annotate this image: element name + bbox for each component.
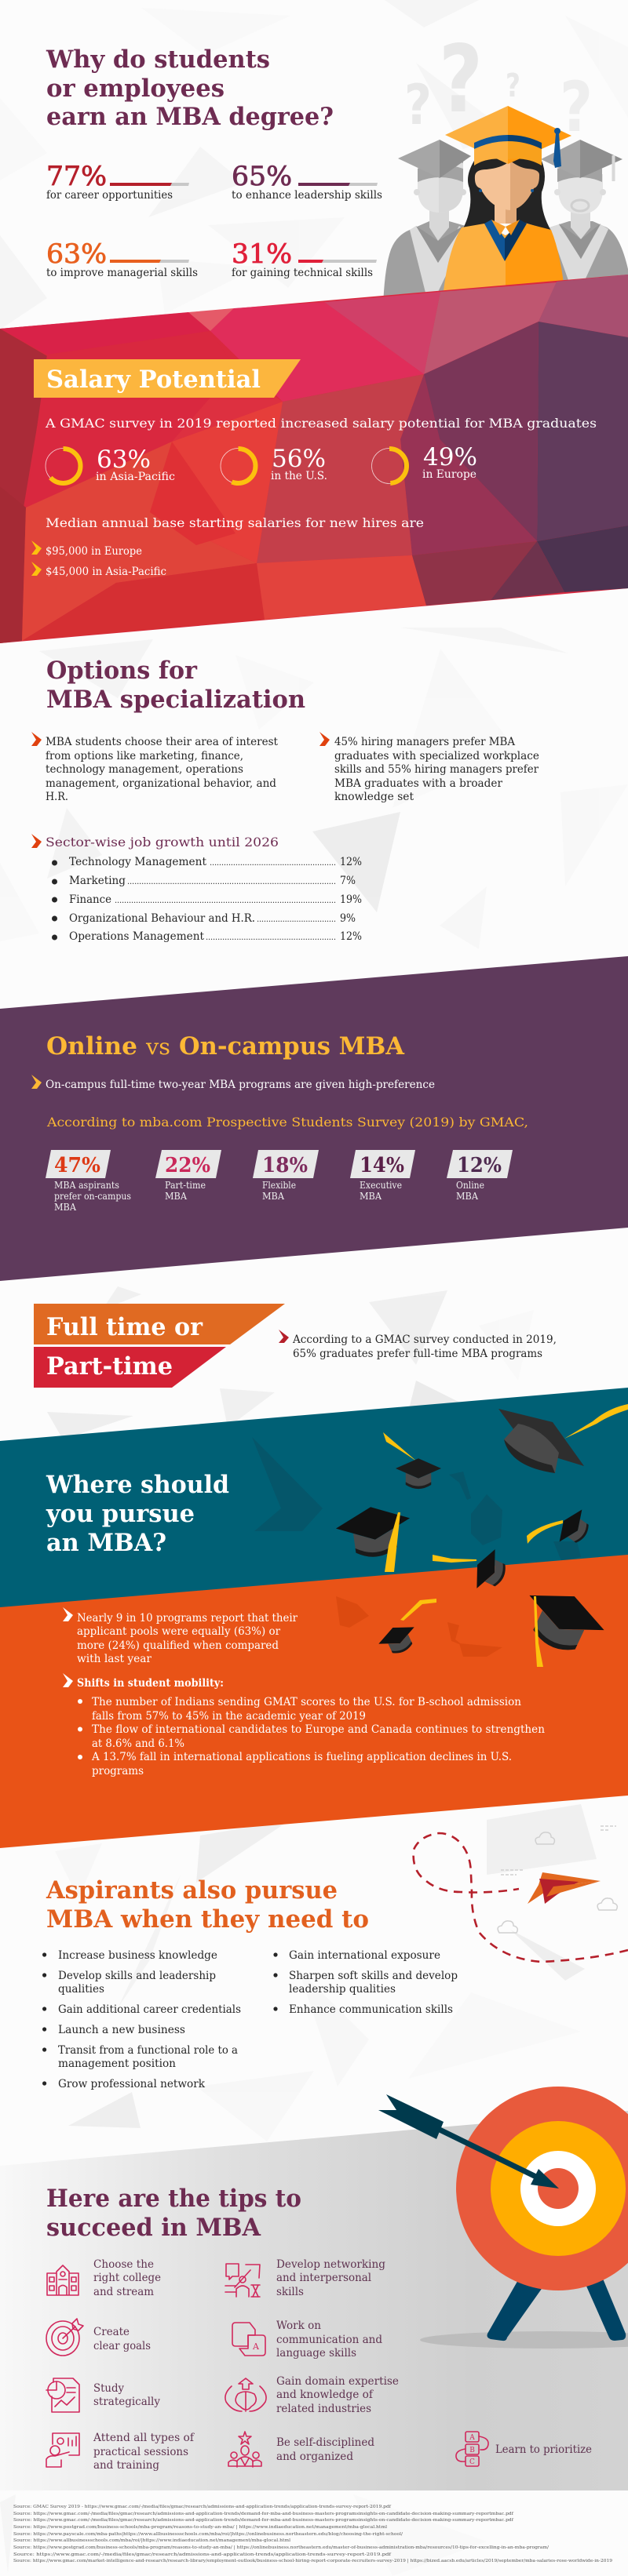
donut: 49% Europe: 49% <box>423 443 477 471</box>
text block: area of interest: H.R. <box>46 791 68 803</box>
icon: graduation cap small top <box>383 1432 441 1489</box>
list: sector job growth: 19% <box>340 893 362 906</box>
list: sector job growth: 9% <box>340 912 356 925</box>
tip: choose college: Choose the <box>93 2258 154 2271</box>
tip: domain expertise: and knowledge of <box>276 2389 374 2401</box>
panel: salary potential <box>0 275 628 643</box>
tip: practical sessions: Attend all types of <box>93 2432 195 2444</box>
banner: full time or part-time: Full time or <box>46 1313 203 1341</box>
icon: ABC flow <box>456 2432 488 2466</box>
text block: area of interest <box>31 732 279 803</box>
icon: clouds <box>498 1826 617 1933</box>
stat box: 22% <box>155 1150 221 1202</box>
list: sector job growth: .............................................................................................. <box>115 897 336 905</box>
text: shifts in student mobility: Shifts in student mobility: <box>77 1677 224 1690</box>
stat box: 12% <box>447 1150 513 1202</box>
icon: graduation cap on divider <box>433 1545 513 1596</box>
stat: 63% managerial skills <box>46 238 198 279</box>
stat box: 22%: Part-time <box>165 1180 206 1191</box>
text: median salaries: Median annual base starting salaries for new hires are <box>46 515 424 530</box>
icon: college building <box>47 2265 78 2295</box>
bullet: on-campus preference: On-campus full-time two-year MBA programs are given high-preference <box>46 1079 435 1091</box>
icon: question marks <box>404 26 593 147</box>
list: reasons column 2: leadership qualities <box>289 1983 396 1996</box>
text block: sources <box>13 2505 612 2563</box>
donut: 56% U.S.: 56% <box>272 445 326 473</box>
heading: online vs on-campus MBA <box>46 1032 405 1061</box>
heading: tips to succeed: Here are the tips to <box>46 2185 301 2213</box>
text block: sources: Source: https://www.postgrad.com/business-schools/mba-program/reasons-to-study-an-mba/ | https://www.indiaeducation.net/management/mba-glocal.html <box>13 2525 387 2530</box>
stat box: 47% <box>46 1150 131 1213</box>
bullet: 95,000 Europe <box>31 540 142 558</box>
text block: hiring managers <box>319 732 539 803</box>
icon: presenter at board <box>46 2433 79 2467</box>
text block: area of interest: technology management, operations <box>46 763 243 776</box>
list: sector job growth: Marketing <box>69 875 126 887</box>
banner: full time or part-time: Part-time <box>46 1352 173 1381</box>
icon: brain and hands <box>225 2378 266 2411</box>
stat: 31% technical skills <box>232 238 377 279</box>
list: sector job growth: 7% <box>340 875 356 887</box>
bullet: 95,000 Europe: $95,000 in Europe <box>46 545 142 558</box>
icon: person with idea and arrow <box>225 2264 260 2297</box>
list: sector job growth: ...................................................... <box>210 859 336 868</box>
icon: graduation cap middle <box>334 1502 414 1572</box>
icon: dashed flight path <box>414 1833 628 1962</box>
icon: ABC flow: B <box>469 2447 475 2454</box>
stat box: 47%: 47% <box>54 1154 100 1177</box>
text block: sources: Source: GMAC Survey 2019 - https://www.gmac.com/-/media/files/gmac/research/admissions-and-application-trends/application-trends-survey-report-2019.pdf <box>13 2505 392 2509</box>
stat box: 18%: 18% <box>262 1154 308 1177</box>
donut: 49% Europe <box>372 443 477 483</box>
tip: networking: skills <box>276 2286 304 2298</box>
title: why earn an MBA: earn an MBA degree? <box>46 103 334 131</box>
text block: sources: Source: https://www.payscale.com/mba-paths|https://www.allbusinessschools.com/mba/roi/|https://onlinebusiness.northeastern.edu/blog/choosing-the-right-school/ <box>13 2532 403 2537</box>
tag: salary potential heading <box>34 359 301 398</box>
stat box: 18% <box>253 1150 319 1202</box>
stat: 77% career opportunities <box>46 161 189 202</box>
icon: graduation cap small orange <box>375 1599 436 1660</box>
stat: 77% career opportunities: for career opportunities <box>46 189 173 202</box>
stat box: 22%: 22% <box>165 1154 210 1177</box>
list: reasons column 1: management position <box>58 2058 176 2070</box>
tip: networking: Develop networking <box>276 2258 385 2271</box>
heading: where should you pursue an MBA <box>46 1471 229 1557</box>
tip: communication: communication and <box>276 2334 382 2346</box>
text: GMAC full-time preference <box>279 1330 557 1360</box>
text: shifts in student mobility <box>63 1673 545 1777</box>
stat box: 47%: MBA <box>54 1202 76 1213</box>
text block: area of interest: MBA students choose their area of interest <box>46 736 279 748</box>
stat: 77% career opportunities: 77% <box>46 161 107 192</box>
panel: online vs on-campus <box>0 956 628 1281</box>
text: shifts in student mobility: The flow of international candidates to Europe and Canada continues to strengthen <box>92 1723 545 1736</box>
tip: create goals <box>46 2319 151 2356</box>
stat box: 18%: Flexible <box>262 1180 296 1191</box>
list: sector job growth: ........................................................................................ <box>127 878 336 886</box>
bullet: 45,000 Asia-Pacific <box>31 562 166 578</box>
tip: study strategically <box>46 2378 160 2412</box>
stat box: 14%: MBA <box>360 1191 382 1202</box>
list: sector job growth: Organizational Behaviour and H.R. <box>69 912 255 925</box>
text: applicant pools: applicant pools were equally (63%) or <box>77 1625 281 1638</box>
list: reasons column 1: Launch a new business <box>58 2024 185 2036</box>
heading: tips to succeed <box>46 2185 301 2242</box>
text block: sources: Source: https://www.gmac.com/-/media/files/gmac/research/admissions-and-application-trends/demand-for-mba-and-business-masters-programsinsights-on-candidate-decision-making-summary-reportmbac.pdf <box>13 2518 514 2523</box>
bullet: 45,000 Asia-Pacific: $45,000 in Asia-Pacific <box>46 566 166 578</box>
list: reasons column 1: Develop skills and leadership <box>58 1970 216 1982</box>
stat box: 14% <box>350 1150 415 1202</box>
heading: aspirants also pursue: MBA when they need to <box>46 1905 369 1934</box>
tip: communication: language skills <box>276 2347 356 2360</box>
icon: question marks: ? <box>439 26 483 134</box>
stat: 63% managerial skills: 63% <box>46 238 107 270</box>
list: sector job growth: ....................................................... <box>206 933 336 942</box>
list: reasons column 1 <box>42 1949 241 2090</box>
list: sector job growth: 12% <box>340 856 362 868</box>
illustration: grey graduate left <box>383 140 471 306</box>
list: reasons column 2 <box>273 1949 458 2016</box>
text block: area of interest: from options like marketing, finance, <box>46 750 243 762</box>
icon: group with star <box>228 2432 261 2467</box>
stat: 63% managerial skills: to improve managerial skills <box>46 267 198 279</box>
illustration: grey graduate right <box>541 140 628 306</box>
heading: online vs on-campus MBA: vs <box>145 1034 170 1060</box>
heading: options for MBA specialization <box>46 657 305 714</box>
text block: sources: Source: https://www.gmac.com/-/media/files/gmac/research/admissions-and-application-trends/application-trends-survey-report-2019.pdf <box>13 2552 392 2557</box>
text block: hiring managers: MBA graduates with a broader <box>334 777 503 790</box>
tag: salary potential heading: Salary Potential <box>46 366 261 394</box>
icon: question marks: ? <box>404 73 432 137</box>
icon: ABC flow: A <box>469 2434 475 2442</box>
icon: ABC flow: C <box>469 2458 475 2466</box>
heading: where should you pursue an MBA: Where should <box>46 1471 229 1499</box>
tip: domain expertise: related industries <box>276 2403 371 2415</box>
text block: sources: Source: https://www.postgrad.com/business-schools/mba-program/reasons-to-study-an-mba/ | https://onlinebusiness.northeastern.edu/master-of-business-administration-mba/resources/10-tips-for-excelling-in-an-mba-program/ <box>13 2545 549 2550</box>
text: applicant pools: with last year <box>77 1653 152 1665</box>
tip: self-disciplined: Be self-disciplined <box>276 2436 374 2449</box>
panel: where should you pursue <box>0 1388 628 1616</box>
panel: tips background <box>0 2111 628 2490</box>
list: sector job growth <box>52 856 362 943</box>
list: reasons column 1: Transit from a functional role to a <box>58 2044 238 2057</box>
tip: prioritize: Learn to prioritize <box>495 2443 592 2456</box>
stat box: 14%: Executive <box>360 1180 402 1191</box>
donut: 63% Asia-Pacific: 63% <box>97 446 151 474</box>
panel: mobility shifts <box>0 1555 628 1848</box>
text: GMAC full-time preference: According to a GMAC survey conducted in 2019, <box>292 1333 557 1346</box>
heading: options for MBA specialization: MBA specialization <box>46 686 305 714</box>
list: reasons column 1: Gain additional career credentials <box>58 2003 241 2016</box>
heading: where should you pursue an MBA: an MBA? <box>46 1529 166 1557</box>
stat: 31% technical skills: 31% <box>232 238 292 270</box>
text block: hiring managers: skills and 55% hiring managers prefer <box>334 763 539 776</box>
tip: prioritize <box>456 2432 592 2466</box>
tip: choose college: and stream <box>93 2286 154 2298</box>
donut: 49% Europe: in Europe <box>422 468 476 481</box>
icon: ghost chevron <box>252 1437 323 1531</box>
list: reasons column 2: Sharpen soft skills and develop <box>289 1970 458 1982</box>
icon: question marks: ? <box>560 67 593 147</box>
donut: 56% U.S.: in the U.S. <box>271 470 327 482</box>
text: shifts in student mobility: A 13.7% fall in international applications is fueling application declines in U.S. <box>91 1751 512 1763</box>
icon: graduation cap right <box>527 1504 597 1552</box>
list: reasons column 2: Enhance communication skills <box>289 2003 453 2016</box>
illustration: target with arrow <box>378 2087 628 2349</box>
tip: create goals: Create <box>93 2326 130 2338</box>
text: applicant pools <box>63 1607 298 1665</box>
list: sector job growth: Technology Management <box>69 856 207 868</box>
tip: create goals: clear goals <box>93 2340 151 2352</box>
tip: choose college <box>47 2258 161 2298</box>
text: survey source: According to mba.com Prospective Students Survey (2019) by GMAC, <box>46 1115 528 1130</box>
heading: options for MBA specialization: Options for <box>46 657 198 685</box>
text: shifts in student mobility: The number of Indians sending GMAT scores to the U.S. for B-school admission <box>92 1696 521 1708</box>
stat box: 12%: 12% <box>457 1154 502 1177</box>
banner: full time or part-time <box>34 1304 285 1388</box>
stat: 65% leadership skills: 65% <box>232 161 292 192</box>
text block: area of interest: management, organizational behavior, and <box>46 777 276 790</box>
stat box: 12%: MBA <box>456 1191 478 1202</box>
tip: study strategically: Study <box>93 2382 124 2395</box>
heading: aspirants also pursue: Aspirants also pursue <box>46 1876 338 1905</box>
tip: domain expertise: Gain domain expertise <box>276 2375 399 2388</box>
icon: graduation cap large orange <box>513 1579 612 1667</box>
illustration: central graduate with orange cap <box>443 106 571 298</box>
heading: where should you pursue an MBA: you pursue <box>46 1500 195 1528</box>
list: sector job growth: 12% <box>340 930 362 943</box>
stat: 65% leadership skills <box>232 161 382 202</box>
stat box: 47%: prefer on-campus <box>54 1191 131 1202</box>
donut: 63% Asia-Pacific: in Asia-Pacific <box>96 471 175 483</box>
tip: communication: Work on <box>276 2319 321 2332</box>
title: why earn an MBA: Why do students <box>46 45 270 74</box>
list: reasons column 1: qualities <box>58 1983 104 1996</box>
tip: choose college: right college <box>93 2272 161 2284</box>
text: GMAC survey intro: A GMAC survey in 2019 reported increased salary potential for MBA graduates <box>45 416 597 431</box>
text block: sources: Source: https://www.gmac.com/market-intelligence-and-research/research-library/employment-outlook/business-school-hiring-report-corporate-recruiters-survey-2019 | https://bized.aacsb.edu/articles/2019/september/mba-salaries-rose-worldwide-in-2019 <box>13 2559 612 2563</box>
list: sector job growth: .................................. <box>257 915 336 924</box>
stat box: 14%: 14% <box>360 1154 404 1177</box>
text block: sources: Source: https://www.gmac.com/-/media/files/gmac/research/admissions-and-application-trends/demand-for-mba-and-business-masters-programsinsights-on-candidate-decision-making-summary-reportmbac.pdf <box>13 2512 514 2516</box>
list: reasons column 1: Grow professional network <box>58 2078 206 2090</box>
tip: study strategically: strategically <box>93 2396 160 2408</box>
tip: communication: A <box>252 2341 260 2352</box>
text: GMAC full-time preference: 65% graduates prefer full-time MBA programs <box>293 1348 542 1360</box>
text: shifts in student mobility: programs <box>92 1765 144 1777</box>
icon: paper plane <box>528 1872 601 1904</box>
heading: online vs on-campus MBA: On-campus MBA <box>179 1032 405 1061</box>
title: why earn an MBA <box>46 45 334 131</box>
tip: self-disciplined <box>228 2432 374 2467</box>
donut: 63% Asia-Pacific <box>46 446 175 483</box>
text block: hiring managers: 45% hiring managers prefer MBA <box>334 736 515 748</box>
heading: aspirants also pursue <box>46 1876 369 1934</box>
icon: goal target <box>46 2319 83 2356</box>
heading: online vs on-campus MBA: Online <box>46 1032 137 1061</box>
heading: sector-wise job growth: Sector-wise job growth until 2026 <box>46 835 279 850</box>
list: sector job growth: Operations Management <box>69 930 205 943</box>
icon: report document <box>46 2378 79 2412</box>
list: sector job growth: Finance <box>69 893 111 906</box>
text: shifts in student mobility: falls from 57% to 45% in the academic year of 2019 <box>92 1710 366 1723</box>
stat box: 47%: MBA aspirants <box>54 1180 119 1191</box>
tip: self-disciplined: and organized <box>276 2450 353 2463</box>
tip: practical sessions: practical sessions <box>93 2446 188 2458</box>
icon: graduation cap large top right <box>498 1404 628 1473</box>
tip: practical sessions <box>46 2432 195 2472</box>
list: reasons column 2: Gain international exposure <box>289 1949 440 1962</box>
heading: tips to succeed: succeed in MBA <box>46 2214 261 2242</box>
stat box: 22%: MBA <box>165 1191 187 1202</box>
tip: practical sessions: and training <box>93 2459 159 2472</box>
text: shifts in student mobility: at 8.6% and 6.1% <box>92 1737 184 1750</box>
list: reasons column 1: Increase business knowledge <box>58 1949 217 1962</box>
stat: 31% technical skills: for gaining technical skills <box>232 267 373 279</box>
text block: hiring managers: graduates with specialized workplace <box>334 750 539 762</box>
text: applicant pools: more (24%) qualified when compared <box>77 1639 279 1652</box>
tip: networking: and interpersonal <box>276 2272 371 2284</box>
icon: translation bubbles <box>232 2323 265 2356</box>
icon: question marks: ? <box>506 67 520 104</box>
stat box: 18%: MBA <box>262 1191 284 1202</box>
text block: hiring managers: knowledge set <box>334 791 414 803</box>
stat: 65% leadership skills: to enhance leadership skills <box>232 189 382 202</box>
title: why earn an MBA: or employees <box>46 75 225 103</box>
stat box: 12%: Online <box>456 1180 484 1191</box>
tip: domain expertise <box>225 2375 399 2415</box>
tip: communication <box>232 2319 382 2360</box>
text block: sources: Source: https://www.allbusinessschools.com/mba/roi/|https://www.indiaeducation.net/management/mba-glocal.html <box>13 2538 290 2543</box>
text: applicant pools: Nearly 9 in 10 programs report that their <box>77 1612 298 1625</box>
donut: 56% U.S. <box>221 445 327 483</box>
tip: networking <box>225 2258 385 2298</box>
